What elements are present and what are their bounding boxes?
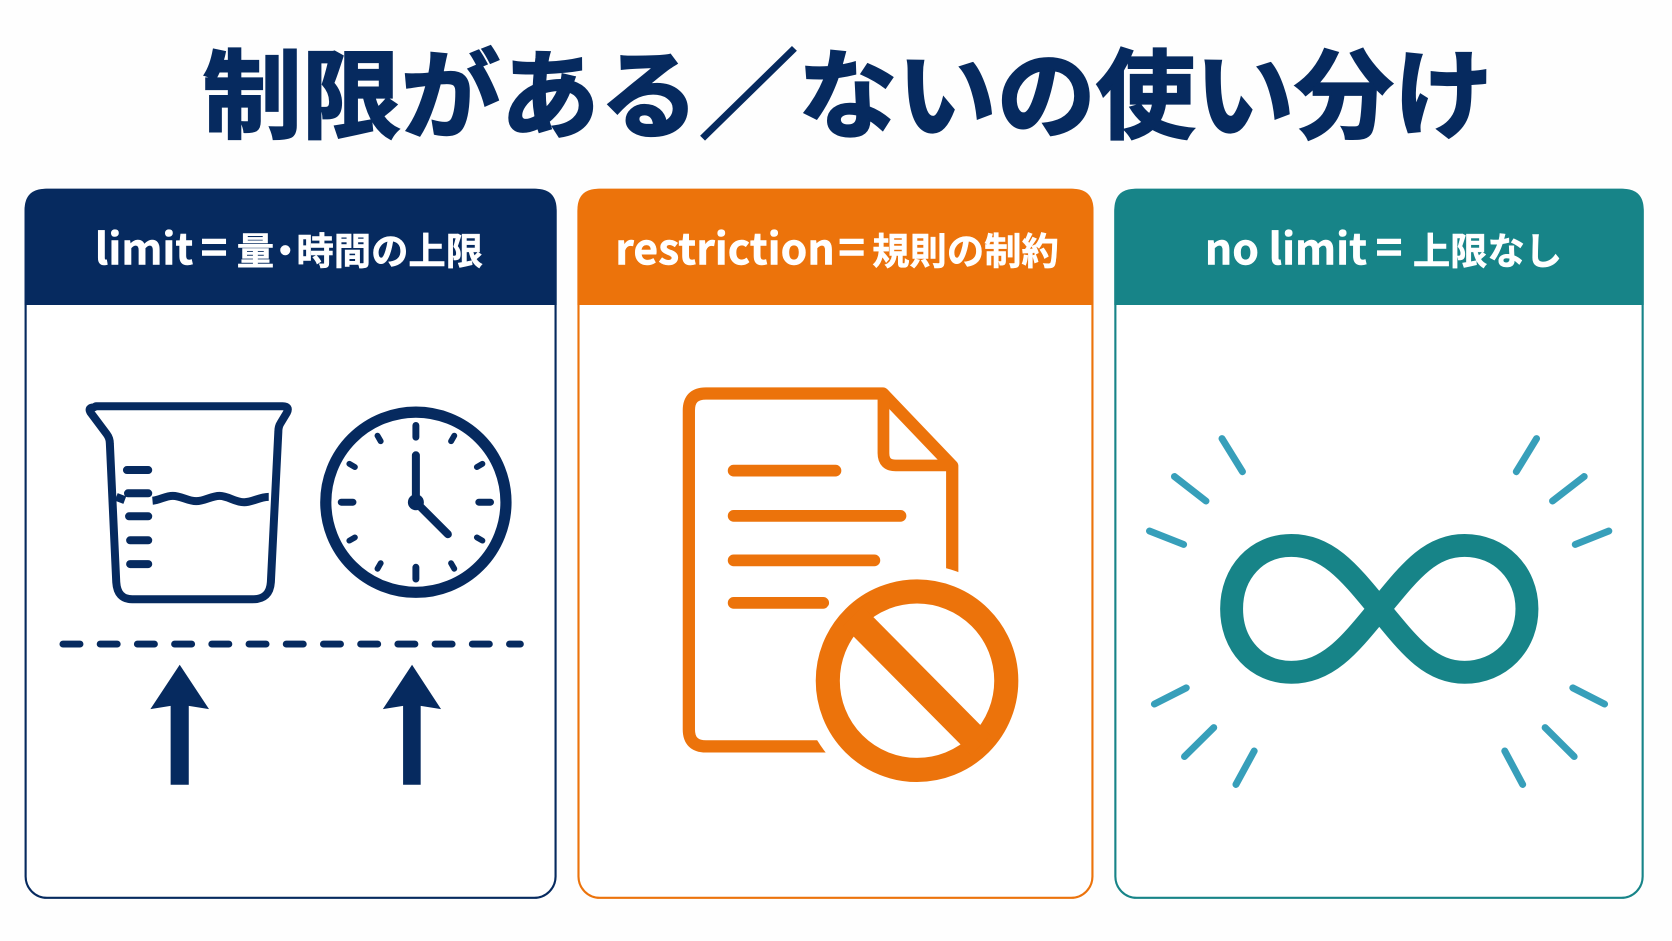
heading: limit: 量 (237, 221, 274, 275)
panel: no limit (1114, 189, 1644, 898)
heading: limit: 時間の上限 (296, 221, 483, 275)
heading: restriction: 規則の制約 (872, 221, 1059, 275)
heading: limit: limit (95, 216, 193, 277)
icon: measuring beaker (90, 406, 288, 599)
header bar: no limit (1114, 189, 1644, 305)
heading: no limit: = (1376, 212, 1403, 278)
heading: restriction: restriction (615, 216, 835, 277)
arrow: up right (383, 665, 441, 785)
panel frame: restriction (578, 190, 1092, 898)
title: 制限がある／ないの使い分け (203, 18, 1493, 159)
icon: clock (326, 412, 506, 592)
heading: restriction: = (838, 212, 865, 278)
header bar: limit (25, 189, 557, 305)
icon: prohibition sign (801, 564, 1033, 797)
heading: no limit: no limit (1205, 216, 1367, 277)
panel frame: no limit (1115, 190, 1643, 898)
heading: limit: = (200, 212, 228, 278)
limit line: dashed (63, 641, 520, 647)
arrow: up left (150, 665, 209, 785)
icon: radiating rays (1149, 439, 1609, 784)
panel frame: limit (26, 190, 556, 898)
panel: restriction (577, 189, 1094, 898)
panel: limit (25, 189, 557, 898)
heading: limit: ・ (267, 221, 304, 275)
icon: infinity (1232, 545, 1527, 672)
header bar: restriction (577, 189, 1094, 305)
heading: no limit: 上限なし (1413, 221, 1562, 275)
icon: document (689, 393, 952, 746)
